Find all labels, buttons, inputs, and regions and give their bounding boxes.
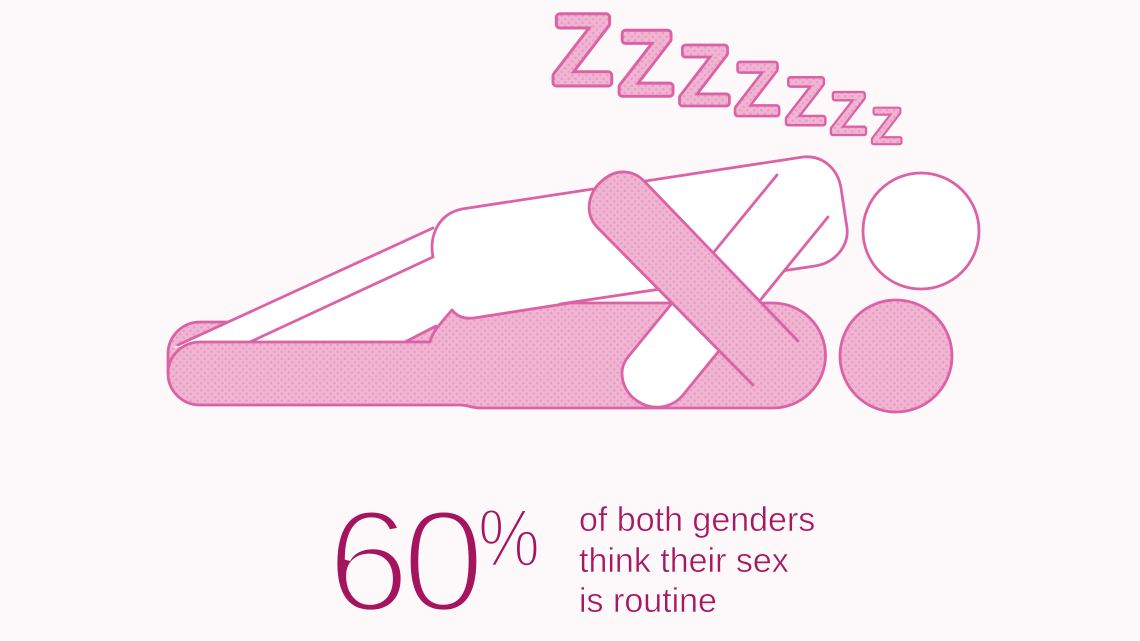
caption: think their sex	[579, 542, 789, 580]
snoring Zs: Z	[620, 16, 672, 112]
snoring Zs: Z	[831, 82, 866, 146]
pink arm	[589, 172, 798, 385]
snoring Zs: Z	[872, 101, 901, 154]
snoring Zs: Z	[786, 67, 825, 137]
snoring Zs: Z	[872, 101, 901, 154]
caption	[579, 501, 815, 620]
torso of upper figure	[432, 157, 847, 304]
statistic: 60%: 0	[402, 480, 485, 641]
illustration: sleeping couple	[168, 157, 979, 412]
body of lower figure	[168, 303, 826, 408]
caption: of both genders	[579, 501, 815, 539]
snoring Zs: Z	[554, 0, 611, 104]
statistic: 60%: 6	[327, 480, 410, 641]
head: pink circle	[840, 300, 952, 412]
statistic: 60%	[327, 480, 540, 641]
snoring Zs: Z	[735, 50, 779, 130]
snoring Zs: Z	[680, 31, 729, 120]
statistic: 60%: %	[478, 493, 540, 584]
back leg of lower figure	[168, 322, 240, 372]
snoring Zs: Z	[554, 0, 611, 104]
raised legs of upper figure	[172, 228, 600, 348]
snoring Zs: Z	[786, 67, 825, 137]
head: white circle	[863, 173, 979, 289]
white arm	[622, 175, 828, 407]
snoring Zs: Z	[620, 16, 672, 112]
snoring Zs	[554, 0, 901, 154]
snoring Zs: Z	[735, 50, 779, 130]
snoring Zs: Z	[680, 31, 729, 120]
snoring Zs: Z	[831, 82, 866, 146]
small hip wedge	[405, 326, 436, 342]
caption: is routine	[579, 582, 717, 620]
